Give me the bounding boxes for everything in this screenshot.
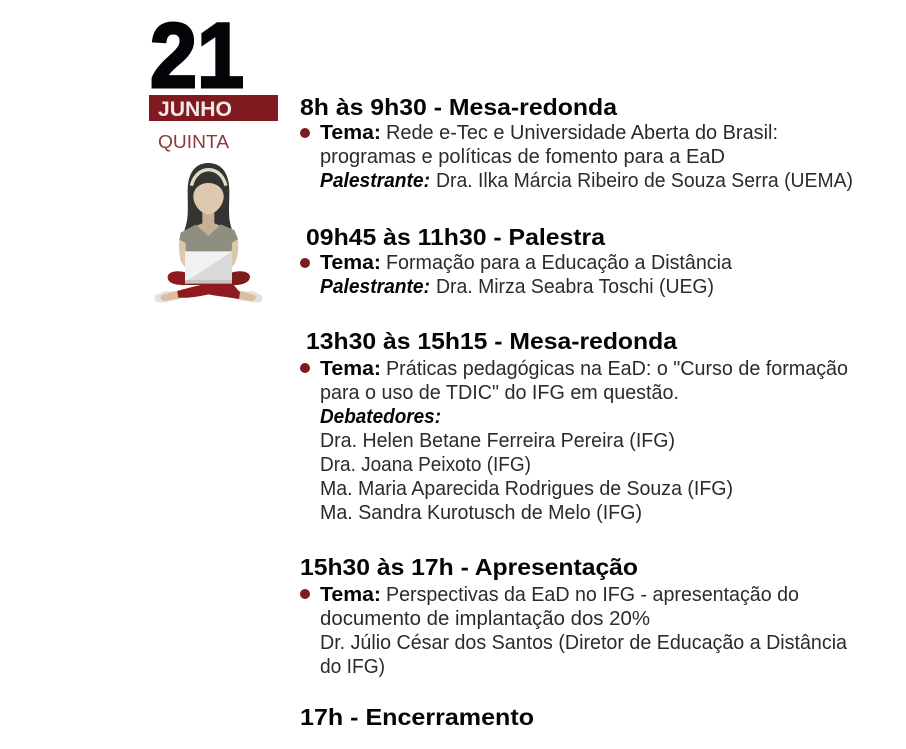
text block: session 4 details — [320, 584, 848, 678]
date number 21: 21 — [150, 5, 244, 107]
text block: session 1 details: programas e políticas de fomento para a EaD — [320, 146, 725, 168]
text block: session 1 details — [320, 122, 853, 192]
heading: session 4 time: 15h30 às 17h - Apresentação — [300, 554, 638, 580]
text block: session 2 details — [320, 252, 733, 298]
text block: session 3 details: Debatedores: — [320, 406, 441, 428]
icon: woman sitting with laptop — [154, 163, 262, 302]
bullet — [300, 258, 310, 268]
month banner — [149, 95, 278, 121]
bullet — [300, 589, 310, 599]
text block: session 4 details: Dr. Júlio César dos Santos (Diretor de Educação a Distância — [320, 632, 848, 654]
text block: session 3 details: Ma. Sandra Kurotusch de Melo (IFG) — [320, 502, 642, 524]
session 1 — [300, 94, 853, 192]
text block: session 4 details: documento de implantação dos 20% — [320, 608, 650, 630]
text block: session 3 details: Ma. Maria Aparecida Rodrigues de Souza (IFG) — [320, 478, 733, 500]
heading: session 2 time: 09h45 às 11h30 - Palestra — [306, 224, 606, 250]
text block: session 3 details: para o uso de TDIC" do IFG em questão. — [320, 382, 679, 404]
bullet — [300, 363, 310, 373]
weekday label: QUINTA — [158, 131, 230, 152]
bullet — [300, 128, 310, 138]
text block: session 3 details: Dra. Helen Betane Ferreira Pereira (IFG) — [320, 430, 675, 452]
text block: session 3 details — [320, 358, 848, 524]
text block: session 2 details: Tema: — [320, 252, 381, 274]
text block: session 2 details: Dra. Mirza Seabra Toschi (UEG) — [436, 276, 714, 298]
text block: session 1 details: Dra. Ilka Márcia Ribeiro de Souza Serra (UEMA) — [436, 170, 853, 192]
heading: closing session: 17h - Encerramento — [300, 704, 534, 730]
text block: session 4 details: do IFG) — [320, 656, 385, 678]
text block: session 1 details: Palestrante: — [320, 170, 430, 192]
heading: session 1 time: 8h às 9h30 - Mesa-redonda — [300, 94, 618, 120]
text block: session 4 details: Perspectivas da EaD no IFG - apresentação do — [386, 584, 799, 606]
text block: session 1 details: Rede e-Tec e Universidade Aberta do Brasil: — [386, 122, 778, 144]
session 3 — [300, 328, 848, 524]
text block: session 2 details: Formação para a Educação a Distância — [386, 252, 733, 274]
text block: session 4 details: Tema: — [320, 584, 381, 606]
session 4 — [300, 554, 848, 678]
text block: session 3 details: Dra. Joana Peixoto (IFG) — [320, 454, 531, 476]
month banner: JUNHO — [158, 98, 232, 121]
session 2 — [300, 224, 733, 298]
text block: session 3 details: Práticas pedagógicas na EaD: o "Curso de formação — [386, 358, 848, 380]
text block: session 3 details: Tema: — [320, 358, 381, 380]
text block: session 1 details: Tema: — [320, 122, 381, 144]
heading: session 3 time: 13h30 às 15h15 - Mesa-redonda — [306, 328, 678, 354]
text block: session 2 details: Palestrante: — [320, 276, 430, 298]
